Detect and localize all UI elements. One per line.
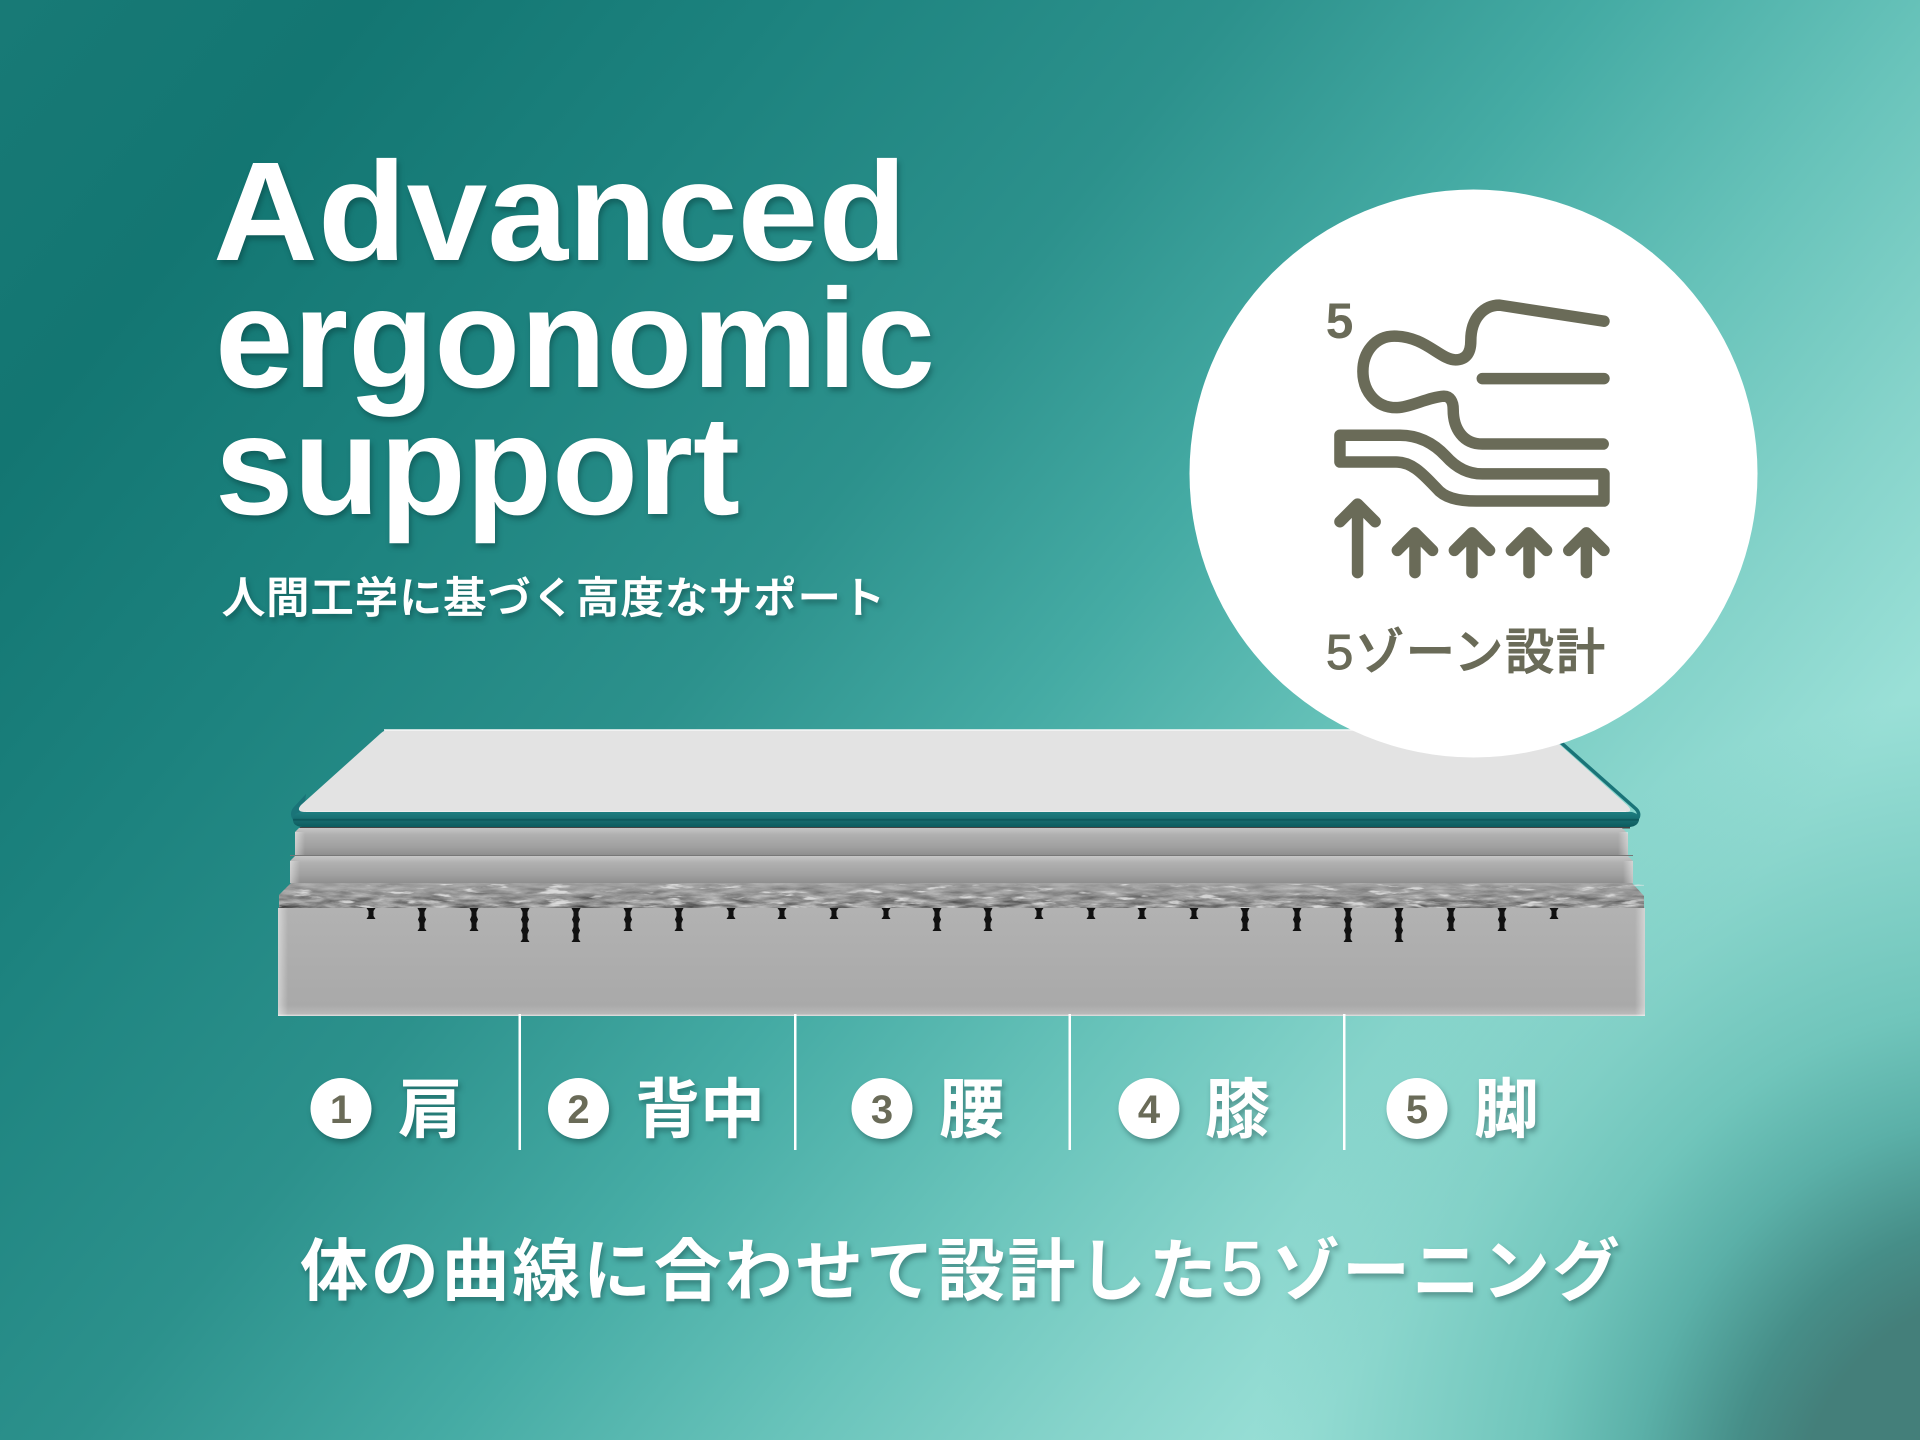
- bottom caption: [300, 1227, 1620, 1312]
- zone 1: shoulder: 1: [330, 1088, 352, 1132]
- foam layer 1: [295, 828, 1628, 855]
- marbled foam layer: [279, 883, 1644, 908]
- zoning slits: [366, 908, 1558, 942]
- zone 3: waist: [852, 1073, 1004, 1146]
- title: ergonomic: [215, 259, 935, 417]
- icon: body on 5-zone mattress: 5: [1326, 293, 1353, 349]
- foam layer 2: [290, 856, 1633, 883]
- zone 5: legs: 5: [1406, 1088, 1428, 1132]
- zone 4: knee: 膝: [1205, 1073, 1270, 1146]
- zone 2: back: 2: [567, 1088, 590, 1132]
- zone 4: knee: 4: [1138, 1088, 1161, 1132]
- zone 5: legs: [1386, 1073, 1539, 1146]
- mattress top surface: [291, 730, 1639, 820]
- bottom caption: 5: [1221, 1227, 1263, 1312]
- zone 3: waist: 腰: [939, 1073, 1004, 1146]
- bottom caption: ゾーニング: [1272, 1234, 1620, 1310]
- subtitle: 人間工学に基づく高度なサポート: [222, 575, 885, 623]
- callout circle: 5 zone design: [1190, 190, 1758, 758]
- support foam base: [278, 908, 1645, 1016]
- title: [213, 132, 935, 544]
- title: support: [215, 386, 740, 544]
- zone 4: knee: [1118, 1073, 1270, 1146]
- zone 2: back: 背中: [635, 1073, 765, 1146]
- zone 1: shoulder: 肩: [398, 1073, 463, 1146]
- zone 2: back: [548, 1073, 765, 1146]
- mattress teal border: [293, 812, 1639, 827]
- callout label: 5ゾーン設計: [1326, 626, 1605, 680]
- bottom caption: 体の曲線に合わせて設計した: [300, 1234, 1217, 1310]
- zone 1: shoulder: [310, 1073, 463, 1146]
- zone 3: waist: 3: [871, 1088, 893, 1132]
- zone 5: legs: 脚: [1474, 1073, 1539, 1146]
- icon: body on 5-zone mattress: [1326, 293, 1604, 573]
- mattress: [278, 730, 1645, 1016]
- zone dividers: [518, 1014, 1346, 1150]
- title: Advanced: [213, 132, 907, 290]
